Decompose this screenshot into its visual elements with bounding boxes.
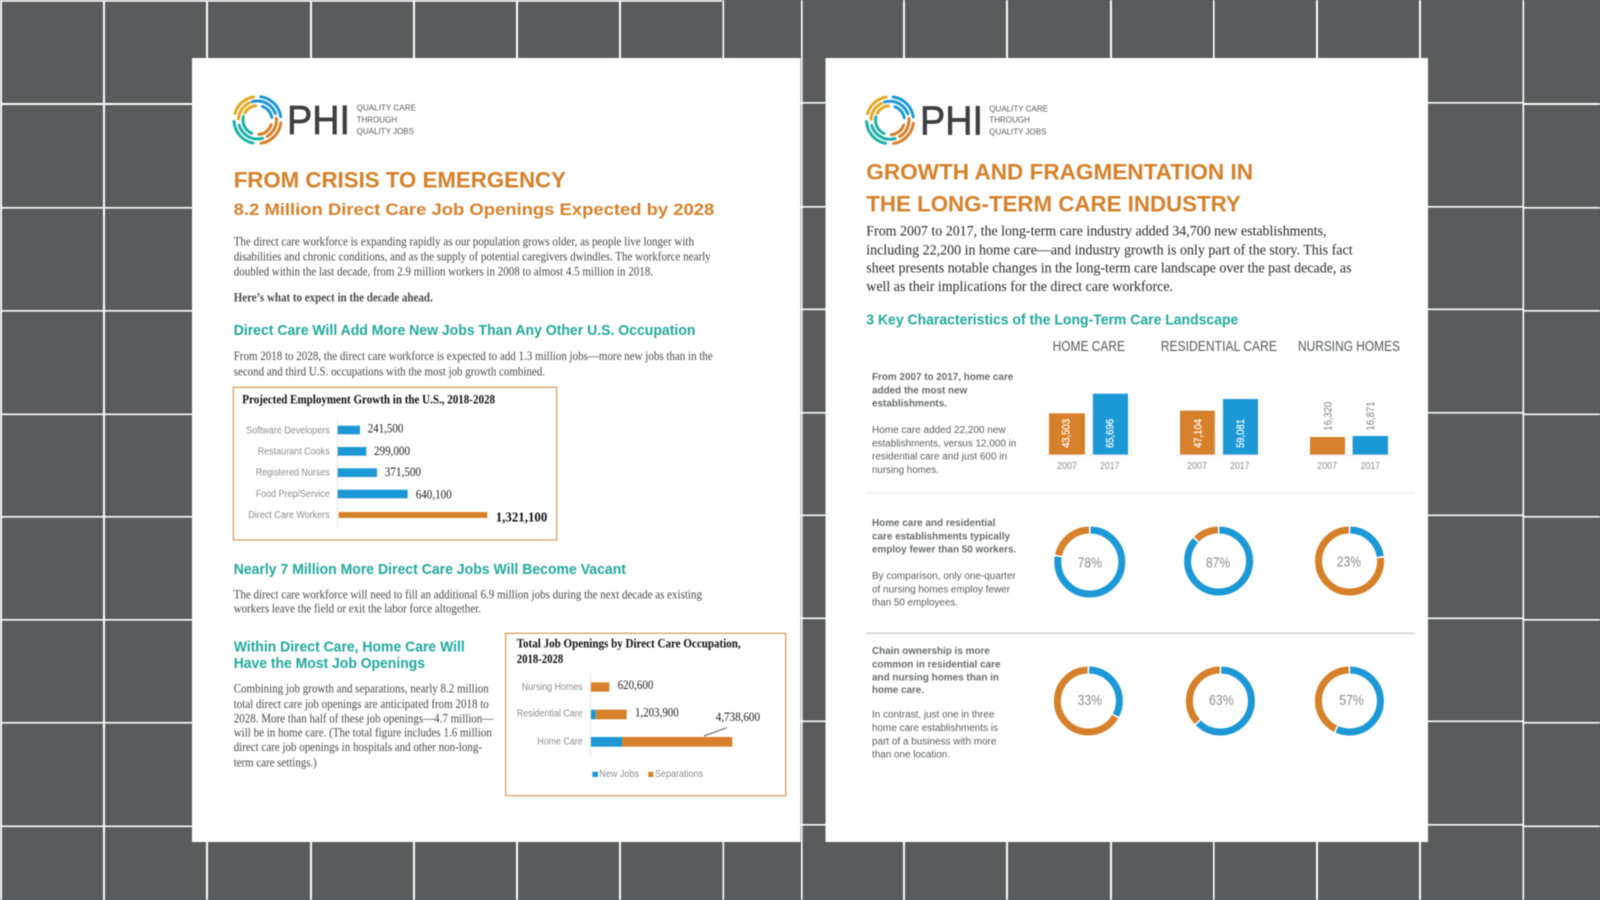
text block: lead-in: Here’s what to expect in the decade ahead.	[234, 291, 433, 305]
text block: intro: sheet presents notable changes in the long-term care landscape over the past decade, as	[866, 260, 1352, 276]
text block: vacant jobs	[234, 587, 703, 616]
donut chart: home care 78%	[1058, 530, 1122, 594]
text block: new jobs	[234, 349, 713, 378]
chart title: Projected Employment Growth in the U.S., 2018-2028	[242, 392, 495, 406]
logo: PHI	[234, 96, 416, 144]
text block: home care openings	[234, 682, 494, 769]
text block: establishment size: of nursing homes employ fewer	[872, 584, 1011, 595]
row: home care: 4,738,600	[716, 709, 760, 724]
bar chart: residential care establishments: 59,081	[1235, 419, 1247, 448]
text block: home care openings: will be in home care. (The total figure includes 1.6 million	[234, 726, 492, 740]
row: food prep: 640,100	[416, 486, 452, 501]
row: registered nurses	[256, 464, 421, 479]
text block: chain ownership: In contrast, just one in three	[872, 710, 995, 721]
row: residential care: 1,203,900	[635, 705, 679, 720]
bar chart: nursing home establishments	[1305, 402, 1392, 472]
text block: establishment size: care establishments typically	[872, 531, 1010, 542]
row: food prep: Food Prep/Service	[256, 489, 330, 500]
row: residential care	[517, 705, 679, 720]
row: residential care: Residential Care	[517, 709, 583, 720]
row: software developers: 241,500	[368, 421, 403, 436]
text block: establishments: added the most new	[872, 385, 968, 396]
tagline: QUALITY JOBS	[989, 126, 1047, 136]
row: home care	[537, 709, 760, 747]
text block: establishments: establishments.	[872, 398, 947, 409]
text block: chain ownership: home care.	[872, 685, 924, 696]
text block: establishments: Home care added 22,200 new	[872, 425, 1006, 436]
column headings: NURSING HOMES	[1298, 339, 1400, 355]
row: direct care workers: Direct Care Workers	[248, 510, 330, 521]
row: food prep	[256, 486, 452, 501]
donut chart: residential care 63%	[1189, 670, 1251, 732]
donut chart: home care 33%: 33%	[1078, 692, 1102, 709]
title: GROWTH AND FRAGMENTATION IN	[866, 159, 1253, 184]
column headings	[1053, 339, 1400, 355]
text block: chain ownership: part of a business with more	[872, 736, 997, 747]
tagline: THROUGH	[989, 115, 1030, 125]
bar chart: nursing home establishments: 16,871	[1365, 402, 1377, 430]
text block: home care openings: total direct care job openings are anticipated from 2018 to	[234, 697, 489, 711]
text block: intro	[234, 235, 711, 278]
icon: PHI rings	[866, 97, 914, 144]
text block: chain ownership: than one location.	[872, 749, 950, 760]
logo: PHI	[866, 97, 1048, 144]
donut chart: residential care 87%: 87%	[1206, 555, 1230, 572]
bar chart: home care establishments: 2007	[1057, 460, 1077, 472]
chart title	[517, 637, 741, 666]
bar chart: nursing home establishments: 2007	[1317, 460, 1337, 472]
row: software developers	[246, 421, 403, 436]
text block: chain ownership	[872, 646, 1001, 760]
wordmark: PHI	[287, 97, 350, 143]
text block: home care openings: 2028. More than half of these job openings—4.7 million—	[234, 711, 494, 725]
tagline: THROUGH	[357, 114, 397, 124]
donut chart: residential care 63%: 63%	[1209, 692, 1234, 709]
text block: intro: including 22,200 in home care—and industry growth is only part of the story. This fact	[866, 242, 1353, 258]
icon: PHI rings	[234, 96, 281, 144]
title	[866, 159, 1253, 217]
bar chart: residential care establishments: 2007	[1187, 460, 1207, 472]
legend	[592, 769, 703, 780]
row: direct care workers	[248, 510, 547, 525]
row: direct care workers: 1,321,100	[496, 510, 547, 525]
donut chart: nursing homes 57%: 57%	[1339, 692, 1364, 709]
row: restaurant cooks: 299,000	[374, 443, 410, 458]
row: restaurant cooks	[258, 443, 410, 458]
text block: establishments: From 2007 to 2017, home care	[872, 372, 1014, 383]
text block: home care openings: direct care job openings in hospitals and other non-long-	[234, 740, 482, 754]
chart title: Total Job Openings by Direct Care Occupation,	[517, 637, 741, 651]
text block: intro: disabilities and chronic conditions, and as the supply of potential caregivers dwindles. The workforce nearly	[234, 250, 711, 264]
title: THE LONG-TERM CARE INDUSTRY	[866, 192, 1241, 217]
title: FROM CRISIS TO EMERGENCY	[234, 168, 566, 193]
column headings: HOME CARE	[1053, 339, 1125, 355]
heading: home care openings: Have the Most Job Openings	[234, 655, 425, 672]
legend: New Jobs	[599, 769, 639, 780]
row: registered nurses: Registered Nurses	[256, 467, 330, 478]
bar chart: home care establishments: 2017	[1100, 460, 1120, 472]
tagline	[357, 103, 416, 136]
row: nursing homes: Nursing Homes	[522, 682, 583, 693]
chart title: 2018-2028	[517, 652, 563, 666]
text block: establishment size: employ fewer than 50 workers.	[872, 544, 1017, 555]
bar chart: residential care establishments: 47,104	[1193, 419, 1205, 448]
row: restaurant cooks: Restaurant Cooks	[258, 446, 330, 457]
text block: home care openings: term care settings.)	[234, 755, 317, 769]
text block: chain ownership: common in residential care	[872, 659, 1001, 670]
text block: establishment size	[872, 518, 1017, 609]
row: nursing homes: 620,600	[618, 677, 653, 692]
wordmark: PHI	[920, 98, 983, 144]
text block: vacant jobs: workers leave the field or exit the labor force altogether.	[234, 602, 481, 616]
subtitle: 8.2 Million Direct Care Job Openings Expected by 2028	[234, 200, 714, 219]
text block: intro	[866, 223, 1353, 295]
text block: new jobs: From 2018 to 2028, the direct care workforce is expected to add 1.3 million jobs—more new jobs than in the	[234, 349, 713, 363]
text block: establishment size: By comparison, only one-quarter	[872, 571, 1016, 582]
text block: intro: The direct care workforce is expanding rapidly as our population grows older, as people live longer with	[234, 235, 695, 249]
text block: establishments: residential care and just 600 in	[872, 451, 1007, 462]
row: nursing homes	[522, 677, 653, 693]
row: home care: Home Care	[537, 736, 583, 747]
donut chart: residential care 87%	[1188, 530, 1250, 592]
tagline: QUALITY JOBS	[357, 126, 414, 136]
text block: intro: well as their implications for the direct care workforce.	[866, 279, 1173, 295]
panel: from crisis to emergency	[192, 58, 800, 842]
bar chart: residential care establishments: 2017	[1230, 460, 1250, 472]
column headings: RESIDENTIAL CARE	[1161, 339, 1277, 355]
bar chart: residential care establishments	[1175, 399, 1262, 472]
tagline: QUALITY CARE	[989, 103, 1048, 113]
row: registered nurses: 371,500	[385, 464, 421, 479]
bar chart: projected employment growth	[233, 387, 557, 540]
row: software developers: Software Developers	[246, 425, 330, 436]
donut chart: home care 78%: 78%	[1078, 555, 1102, 572]
text block: home care openings: Combining job growth and separations, nearly 8.2 million	[234, 682, 489, 696]
text block: chain ownership: home care establishments is	[872, 723, 998, 734]
text block: intro: From 2007 to 2017, the long-term care industry added 34,700 new establishments,	[866, 223, 1326, 239]
heading: new jobs: Direct Care Will Add More New Jobs Than Any Other U.S. Occupation	[234, 322, 695, 339]
text block: establishments: nursing homes.	[872, 465, 939, 476]
bar chart: nursing home establishments: 16,320	[1323, 402, 1335, 431]
text block: vacant jobs: The direct care workforce will need to fill an additional 6.9 million jobs during the next decade as existing	[234, 587, 703, 601]
donut chart: home care 33%	[1057, 670, 1119, 732]
donut chart: nursing homes 57%	[1318, 670, 1380, 732]
donut chart: nursing homes 23%	[1319, 530, 1381, 592]
bar chart: home care establishments: 43,503	[1061, 419, 1073, 448]
tagline	[989, 103, 1048, 136]
bar chart: home care establishments	[1045, 394, 1132, 472]
text block: new jobs: second and third U.S. occupations with the most job growth combined.	[234, 364, 545, 378]
text block: intro: doubled within the last decade, from 2.9 million workers in 2008 to almost 4.5 million in 2018.	[234, 264, 653, 278]
heading: home care openings	[234, 639, 465, 672]
heading: home care openings: Within Direct Care, Home Care Will	[234, 639, 465, 656]
bar chart: home care establishments: 65,696	[1104, 419, 1116, 448]
text block: establishment size: Home care and residential	[872, 518, 996, 529]
text block: chain ownership: Chain ownership is more	[872, 646, 990, 657]
panel: growth and fragmentation	[826, 58, 1428, 842]
donut chart: nursing homes 23%: 23%	[1337, 554, 1361, 571]
text block: chain ownership: and nursing homes than in	[872, 673, 999, 684]
text block: establishments	[872, 372, 1016, 476]
bar chart: total job openings	[506, 633, 786, 796]
heading: key characteristics: 3 Key Characteristics of the Long-Term Care Landscape	[866, 311, 1238, 328]
heading: vacant jobs: Nearly 7 Million More Direct Care Jobs Will Become Vacant	[234, 561, 626, 578]
tagline: QUALITY CARE	[357, 103, 416, 113]
text block: establishments: establishments, versus 12,000 in	[872, 438, 1016, 449]
text block: establishment size: than 50 employees.	[872, 598, 958, 609]
legend: Separations	[655, 769, 703, 780]
bar chart: nursing home establishments: 2017	[1361, 460, 1380, 472]
